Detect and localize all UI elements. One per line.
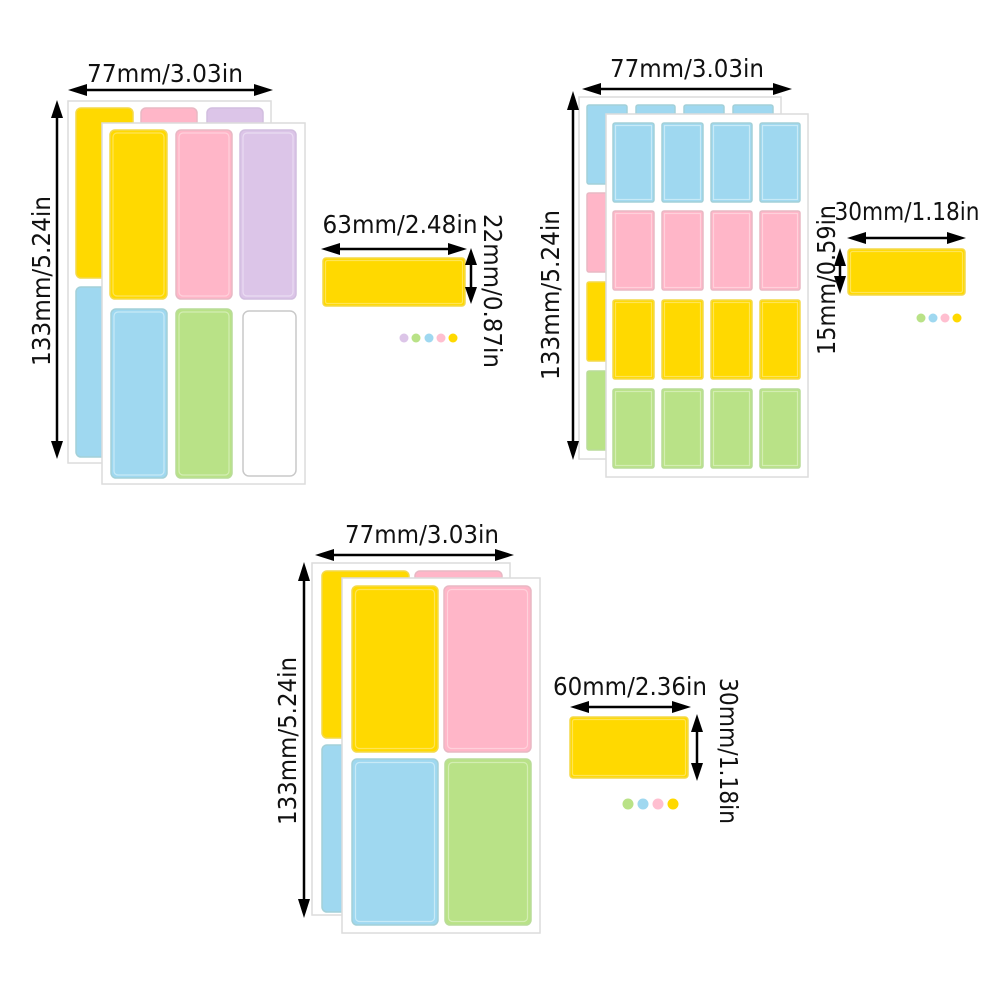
label height arrow bbox=[465, 248, 477, 304]
single label sample bbox=[570, 717, 688, 778]
label height arrow bbox=[691, 714, 703, 781]
label width text: 63mm/2.48in bbox=[322, 210, 478, 239]
height text: 133mm/5.24in bbox=[273, 657, 302, 825]
label height text: 30mm/1.18in bbox=[714, 678, 743, 824]
colour dots bbox=[916, 314, 962, 322]
panel: six-label sheets bbox=[27, 59, 507, 484]
height arrow: sheet bbox=[298, 562, 310, 918]
width arrow: sheet bbox=[68, 84, 273, 96]
single label sample bbox=[848, 249, 965, 295]
width text: 77mm/3.03in bbox=[87, 59, 243, 88]
height arrow: sheet bbox=[51, 100, 63, 459]
panel: four-label sheets bbox=[273, 520, 743, 933]
label width text: 30mm/1.18in bbox=[834, 197, 980, 226]
label width arrow bbox=[847, 232, 966, 244]
label width arrow bbox=[321, 243, 467, 255]
width arrow: sheet bbox=[582, 83, 792, 95]
width text: 77mm/3.03in bbox=[345, 520, 499, 549]
width arrow: sheet bbox=[315, 549, 514, 561]
label height text: 15mm/0.59in bbox=[812, 205, 841, 355]
back sheet with six labels bbox=[68, 101, 271, 463]
label height text: 22mm/0.87in bbox=[478, 214, 507, 368]
front sheet with sixteen labels bbox=[606, 114, 808, 477]
label height arrow bbox=[834, 248, 846, 294]
height text: 133mm/5.24in bbox=[536, 210, 565, 380]
panel: sixteen-label sheets bbox=[536, 54, 980, 477]
height arrow: sheet bbox=[567, 91, 579, 460]
width text: 77mm/3.03in bbox=[610, 54, 764, 83]
front sheet with four labels bbox=[342, 578, 540, 933]
back sheet with four labels bbox=[312, 563, 510, 915]
colour dots bbox=[400, 334, 458, 342]
back sheet with sixteen labels bbox=[579, 97, 781, 459]
colour dots bbox=[622, 798, 678, 810]
label width text: 60mm/2.36in bbox=[553, 672, 707, 701]
height text: 133mm/5.24in bbox=[27, 196, 56, 366]
front sheet with six labels bbox=[102, 123, 305, 484]
label width arrow bbox=[570, 701, 691, 713]
single label sample bbox=[323, 258, 465, 306]
